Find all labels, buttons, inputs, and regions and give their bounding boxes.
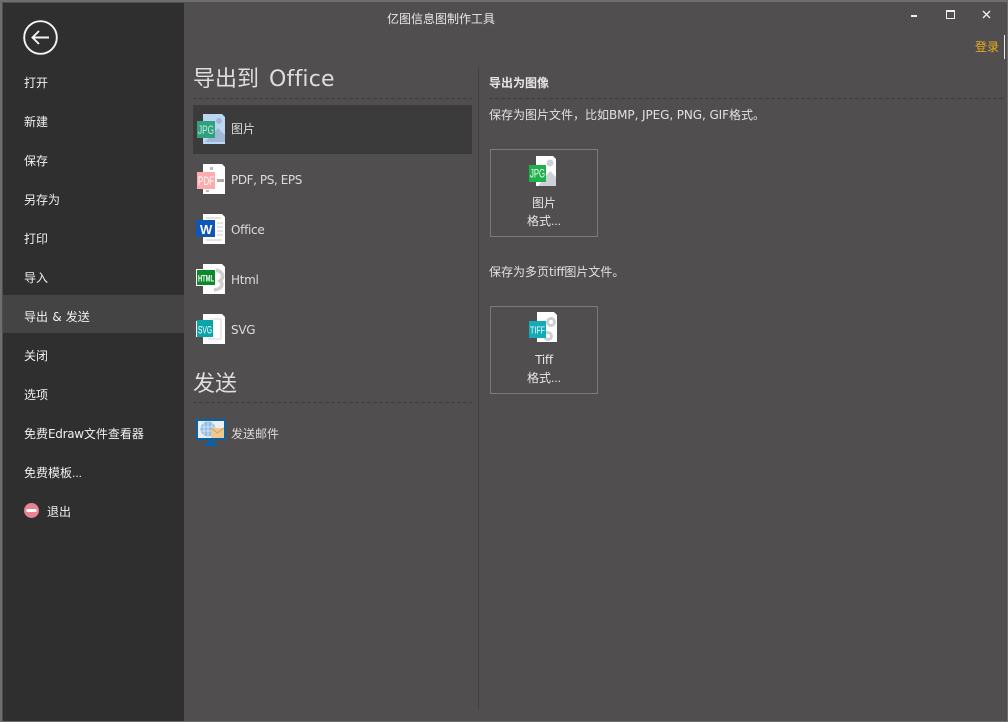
label: Html: Html [231, 273, 259, 287]
icon: exit [24, 503, 39, 518]
button: tiff format: Tiff [535, 353, 553, 367]
description: image formats: 保存为图片文件，比如BMP, JPEG, PNG, GIF格式。 [489, 108, 765, 122]
login link: 登录 [975, 40, 999, 54]
icon: HTML: HTML [198, 274, 214, 284]
panel: sidebar menu [3, 3, 184, 722]
label: PDF PS EPS: PDF, PS, EPS [231, 173, 302, 187]
button: image format: 图片 [532, 196, 556, 210]
icon: JPG [197, 114, 225, 144]
menu item: options: 选项 [24, 388, 48, 402]
window title: 亿图信息图制作工具 [387, 12, 495, 26]
menu item: save as: 另存为 [24, 193, 60, 207]
button: image format [490, 149, 598, 237]
icon: close [982, 10, 990, 18]
icon: SVG: SVG [198, 324, 212, 336]
login caret [1004, 35, 1005, 59]
icon: maximize [946, 10, 955, 19]
icon: PDF [197, 164, 225, 194]
heading: send: 发送 [193, 371, 237, 396]
icon: JPG: JPG [198, 125, 214, 137]
button: tiff format: 格式... [527, 371, 561, 385]
icon: Word: W [200, 222, 213, 237]
menu item: save: 保存 [24, 154, 48, 168]
icon: JPG green [529, 156, 556, 186]
heading: export to Office: 导出到 Office [193, 66, 335, 92]
label: send email: 发送邮件 [231, 427, 279, 441]
menu item: free Edraw viewer: 免费Edraw文件查看器 [24, 427, 144, 441]
column divider [478, 68, 479, 710]
menu item: exit: 退出 [47, 505, 71, 519]
description: multipage tiff: 保存为多页tiff图片文件。 [489, 265, 624, 279]
icon: SVG [196, 314, 225, 344]
icon: JPG green: JPG [530, 168, 545, 180]
label: image: 图片 [231, 122, 255, 136]
menu item: export and send: 导出 & 发送 [24, 310, 90, 324]
menu item: close: 关闭 [24, 349, 48, 363]
menu item: print: 打印 [24, 232, 48, 246]
icon: Word [196, 214, 225, 244]
button: image format: 格式... [527, 214, 561, 228]
menu item: new: 新建 [24, 115, 48, 129]
icon: HTML [196, 264, 225, 294]
menu item: import: 导入 [24, 271, 48, 285]
label: Office: Office [231, 223, 264, 237]
icon: TIFF [529, 312, 557, 342]
button: tiff format [490, 306, 598, 394]
icon: minimize [911, 15, 917, 17]
menu item: free templates: 免费模板... [24, 466, 82, 480]
menu item: open: 打开 [24, 76, 48, 90]
icon: back arrow [23, 20, 58, 55]
icon: PDF: PDF [198, 176, 214, 188]
icon: TIFF: TIFF [530, 324, 545, 336]
heading: export as image: 导出为图像 [489, 76, 549, 90]
menu highlight: export and send [3, 295, 184, 333]
label: SVG: SVG [231, 323, 255, 337]
selected row: image [193, 105, 472, 154]
icon: send email [196, 419, 226, 446]
